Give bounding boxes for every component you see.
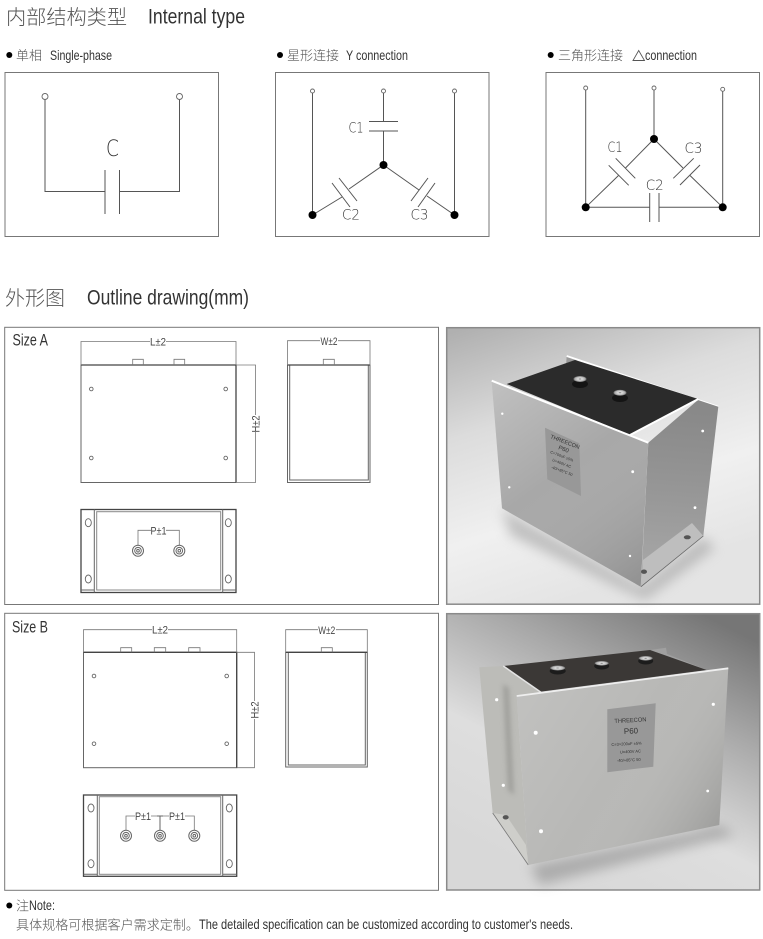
floor shadow [502, 508, 715, 600]
dark top [507, 360, 698, 435]
side view B [286, 625, 367, 767]
note: 具体规格可根据客户需求定制。 [16, 914, 199, 934]
front plate [492, 381, 648, 587]
terminals A [572, 376, 628, 402]
subheading: Y connection [277, 45, 408, 64]
product label A [545, 428, 581, 496]
heading: outline drawing: Outline drawing(mm) [87, 286, 249, 310]
Y connection circuit diagram: C1 [348, 120, 364, 136]
single-phase circuit diagram: C [106, 137, 119, 162]
left inner plate [479, 666, 540, 865]
product label A: P60 [557, 445, 570, 455]
heading: internal type: Internal type [148, 6, 245, 28]
front view B: L±2 [152, 625, 168, 637]
note: 注 [16, 896, 29, 914]
bottom view B [84, 795, 237, 876]
label: size A: Size A [12, 330, 48, 350]
product label A: C=700uF ±5% [550, 450, 574, 463]
panel: single-phase [5, 45, 218, 236]
panel: size B drawing [5, 613, 438, 890]
heading: internal type [6, 1, 245, 30]
product label B: -40/+85°C 50 [617, 757, 642, 763]
photo: size B capacitor [447, 614, 760, 890]
single-phase circuit diagram [5, 72, 218, 236]
mounting holes B [495, 698, 715, 833]
front view B: H±2 [249, 702, 261, 718]
dark top [503, 650, 707, 692]
Y connection circuit diagram: C2 [342, 208, 360, 224]
note: The detailed specification can be customized according to customer's needs. [199, 916, 573, 932]
back plate [566, 356, 578, 366]
product label B [607, 703, 656, 772]
side view A: W±2 [320, 336, 338, 348]
panel: delta connection [546, 45, 760, 236]
panel: size A drawing [5, 327, 438, 604]
delta connection circuit diagram: C1 [608, 140, 622, 156]
mounting holes A [501, 412, 704, 574]
product label B: P60 [624, 726, 639, 736]
terminals B [550, 656, 653, 674]
back plate edge [650, 648, 707, 670]
subheading: delta connection: connection [645, 47, 697, 63]
Y connection circuit diagram [276, 72, 489, 236]
Y connection circuit diagram: C3 [410, 208, 428, 224]
product label B: C=3×200uF ±5% [611, 740, 642, 747]
subheading: single-phase: Single-phase [50, 47, 112, 63]
panel: Y connection [276, 45, 489, 236]
bottom view B: P±1 [169, 811, 185, 823]
side view A [288, 336, 370, 482]
product label A: U=400V AC [552, 458, 572, 469]
heading: internal type: 内部结构类型 [6, 1, 127, 30]
subheading: Y connection: Y connection [346, 47, 408, 63]
floor shadow [530, 825, 735, 885]
subheading: Y connection: 星形连接 [287, 45, 339, 64]
front view A [81, 336, 262, 482]
label: size B: Size B [12, 618, 48, 636]
bottom view A [81, 510, 236, 592]
subheading: single-phase [6, 45, 112, 64]
delta connection circuit diagram: C2 [646, 178, 664, 194]
delta connection circuit diagram [546, 72, 760, 236]
front plate [517, 668, 728, 865]
subheading: delta connection: 三角形连接 [558, 45, 623, 64]
front view B [84, 625, 261, 768]
heading: outline drawing: 外形图 [5, 282, 65, 311]
side view B: W±2 [318, 625, 335, 637]
product label B: THREECON [614, 717, 647, 725]
subheading: single-phase: 单相 [16, 45, 42, 64]
delta connection circuit diagram: C3 [684, 141, 702, 157]
product label A: -40/+85°C 50 [551, 465, 573, 477]
note: Note: [29, 897, 55, 913]
note [6, 896, 573, 934]
subheading: delta connection [548, 45, 697, 64]
product label B: U=400V AC [620, 748, 641, 754]
bottom view B: P±1 [135, 811, 151, 823]
product label A: THREECON [549, 434, 580, 451]
inner side and floor [641, 400, 718, 587]
bottom view A: P±1 [150, 526, 166, 538]
heading: outline drawing [5, 282, 249, 311]
front view A: L±2 [150, 336, 166, 348]
front view A: H±2 [250, 416, 262, 432]
photo: size A capacitor [447, 328, 760, 604]
